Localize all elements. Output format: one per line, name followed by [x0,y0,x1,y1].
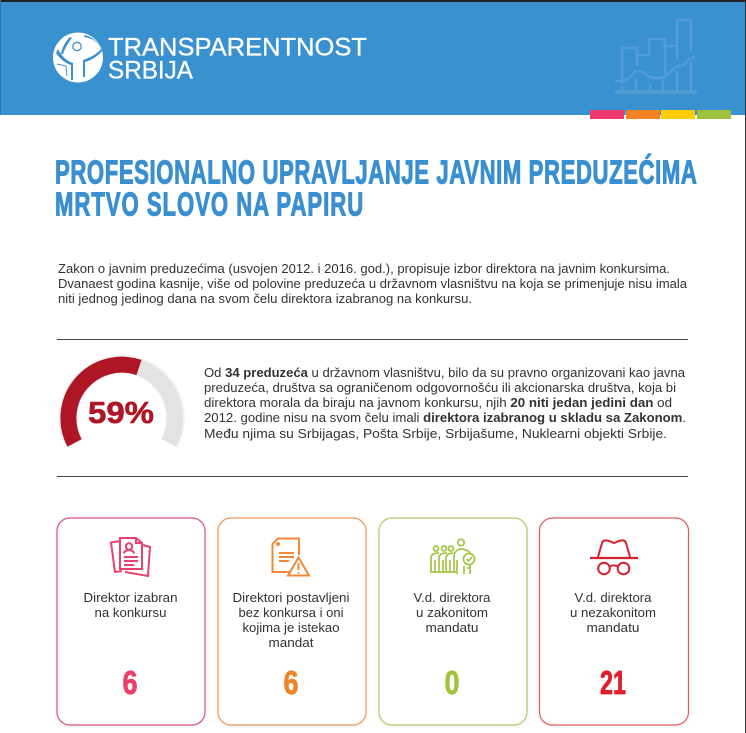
title [55,154,697,223]
card: acting lawful: mandatu [426,620,478,635]
text block: 34 preduzeća: preduzeća, društva sa ograničenom odgovornošću ili akcionarska društva, koja bi [204,381,676,395]
gauge: 59%: 59% [88,395,154,430]
title: MRTVO SLOVO NA PAPIRU [55,186,363,223]
icon: header chart [615,20,697,92]
card: acting lawful: V.d. direktora [414,590,491,605]
icon: logo globe with figure [53,32,103,82]
colour strip [590,110,731,119]
card: director selected: Direktor izabran [84,590,178,605]
card: directors without competition: Direktori postavljeni [232,590,350,605]
text block: 34 preduzeća: Među njima su Srbijagas, Pošta Srbije, Srbijašume, Nuklearni objekti Srbije. [204,427,667,441]
text block: 34 preduzeća: 2012. godine nisu na svom čelu imali direktora izabranog u skladu sa Zakonom . [204,411,686,425]
card: directors without competition: bez konkursa i oni [238,605,344,620]
icon: hat and glasses [590,540,638,574]
card: acting unlawful: mandatu [586,620,640,635]
text block: 34 preduzeća: Od 34 preduzeća u državnom vlasništvu, bilo da su pravno organizovani kao javna [204,366,685,380]
intro text: Zakon o javnim preduzećima (usvojen 2012. i 2016. god.), propisuje izbor direktora na javnim konkursima. [58,262,670,276]
card: acting unlawful [540,518,688,726]
intro text: Dvanaest godina kasnije, više od polovine preduzeća u državnom vlasništvu na koja se primenjuje nisu imala [58,277,687,291]
card: acting lawful: u zakonitom [416,605,488,620]
card: directors without competition: 6 [284,664,298,701]
logo wordmark [108,34,367,84]
card: acting unlawful: u nezakonitom [570,605,656,620]
card: director selected [57,518,205,726]
card: director selected: na konkursu [94,605,166,620]
card: directors without competition [218,518,366,726]
card: acting unlawful: V.d. direktora [574,590,652,605]
gauge: 59% [68,364,175,443]
icon: group with check badge [430,539,474,574]
icon: document with warning [272,538,309,576]
card: acting unlawful: 21 [600,664,626,701]
text block: 34 preduzeća: direktora morala da biraju na javnom konkursu, njih 20 niti jedan jedini dan od [204,396,672,410]
text block: 34 preduzeća [204,366,686,441]
intro text: niti jednog jedinog dana na svom čelu direktora izabranog na konkursu. [58,292,472,306]
card: acting lawful [379,518,527,726]
card: director selected: 6 [122,664,138,701]
card: directors without competition: mandat [268,635,314,650]
logo: Transparentnost Srbija [53,32,367,84]
card: acting lawful: 0 [444,664,460,701]
logo wordmark: SRBIJA [108,56,193,84]
title: PROFESIONALNO UPRAVLJANJE JAVNIM PREDUZEĆIMA [55,154,697,191]
intro text [58,262,687,306]
icon: documents with portrait [111,538,150,576]
card: directors without competition: kojima je istekao [242,620,340,635]
logo wordmark: TRANSPARENTNOST [108,34,367,62]
